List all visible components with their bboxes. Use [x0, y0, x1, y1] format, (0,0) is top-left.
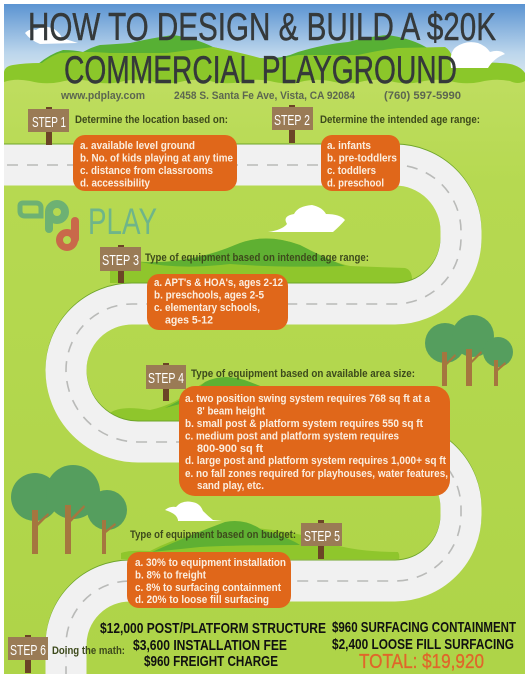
hill behind step 3	[110, 238, 412, 283]
step 1 sign	[28, 107, 69, 145]
cost list: left: $12,000 POST/PLATFORM STRUCTURE	[100, 620, 326, 637]
step 6 sign	[8, 635, 48, 673]
trees: left	[11, 465, 127, 554]
contact line: www.pdplay.com	[60, 90, 145, 102]
step 3 sign: STEP 3	[102, 252, 139, 269]
panel: step 4 list: sand play, etc.	[197, 480, 264, 492]
step 1 sign: STEP 1	[32, 114, 66, 131]
panel: step 2 list	[321, 135, 400, 191]
total: TOTAL: $19,920	[359, 651, 484, 673]
panel: step 4 list: c. medium post and platform system requires	[185, 430, 399, 442]
contact line	[60, 90, 461, 102]
panel: step 2 list: d. preschool	[327, 178, 384, 190]
panel: step 5 list	[127, 552, 291, 608]
step 6 heading: Doing the math:	[52, 645, 125, 657]
panel: step 5 list: d. 20% to loose fill surfacing	[135, 594, 269, 606]
panel: step 1 list	[73, 135, 237, 191]
road	[4, 164, 461, 674]
panel: step 1 list: c. distance from classrooms	[80, 165, 213, 177]
step 3 sign	[100, 245, 141, 283]
panel: step 1 list: d. accessibility	[80, 178, 151, 190]
step 5 sign	[301, 520, 342, 559]
step 5 sign: STEP 5	[304, 528, 340, 545]
panel: step 4 list: a. two position swing system requires 768 sq ft at a	[185, 393, 431, 405]
cloud: top left	[25, 27, 78, 44]
panel: step 1 list: a. available level ground	[80, 140, 195, 152]
panel: step 4 list	[179, 386, 450, 496]
panel: step 4 list: b. small post & platform system requires 550 sq ft	[185, 418, 423, 430]
step 1 heading: Determine the location based on:	[75, 114, 228, 126]
panel: step 2 list: c. toddlers	[327, 165, 376, 177]
cloud: top right	[451, 42, 505, 68]
panel: step 2 list: b. pre-toddlers	[327, 152, 397, 164]
cost list: left: $3,600 INSTALLATION FEE	[133, 637, 287, 654]
panel: step 5 list: c. 8% to surfacing containment	[135, 582, 281, 594]
panel: step 3 list: a. APT's & HOA's, ages 2-12	[154, 277, 283, 289]
contact line: (760) 597-5990	[384, 90, 461, 102]
step 2 sign: STEP 2	[274, 112, 310, 129]
middle hills	[38, 47, 453, 75]
panel: step 5 list: a. 30% to equipment installation	[135, 557, 286, 569]
hill behind step 4	[110, 377, 300, 424]
title	[28, 6, 496, 92]
cost list: left	[100, 620, 326, 670]
panel: step 2 list: a. infants	[327, 140, 371, 152]
sky	[4, 4, 525, 74]
step 3 heading: Type of equipment based on intended age range:	[145, 252, 369, 264]
cloud: middle	[268, 205, 345, 232]
panel: step 4 list: d. large post and platform system requires 1,000+ sq ft	[185, 455, 446, 467]
panel: step 3 list: c. elementary schools,	[154, 302, 260, 314]
logo: pd play: PLAY	[88, 201, 157, 242]
cost list: right	[332, 619, 516, 653]
panel: step 4 list: 8' beam height	[197, 406, 265, 418]
cloud: lower	[165, 502, 222, 521]
step 4 heading: Type of equipment based on available area size:	[191, 368, 415, 380]
cost list: left: $960 FREIGHT CHARGE	[144, 653, 278, 670]
panel: step 3 list: ages 5-12	[165, 314, 213, 326]
step 2 sign	[272, 105, 313, 143]
step 4 sign	[146, 363, 186, 401]
panel: step 5 list: b. 8% to freight	[135, 570, 206, 582]
step 6 sign: STEP 6	[10, 642, 46, 659]
step 4 sign: STEP 4	[148, 370, 184, 387]
front hills band	[4, 63, 525, 83]
step 5 heading: Type of equipment based on budget:	[130, 529, 296, 541]
panel: step 3 list: b. preschools, ages 2-5	[154, 290, 264, 302]
panel: step 4 list: e. no fall zones required for playhouses, water features,	[185, 468, 448, 480]
panel: step 4 list: 800-900 sq ft	[197, 443, 263, 455]
contact line: 2458 S. Santa Fe Ave, Vista, CA 92084	[174, 90, 356, 102]
back hills	[38, 35, 450, 75]
panel: step 1 list: b. No. of kids playing at any time	[80, 152, 233, 164]
logo: pd play	[20, 201, 157, 248]
step 2 heading: Determine the intended age range:	[320, 114, 480, 126]
trees: right	[425, 315, 513, 386]
panel: step 3 list	[147, 274, 288, 330]
hill behind step 5	[121, 521, 399, 559]
